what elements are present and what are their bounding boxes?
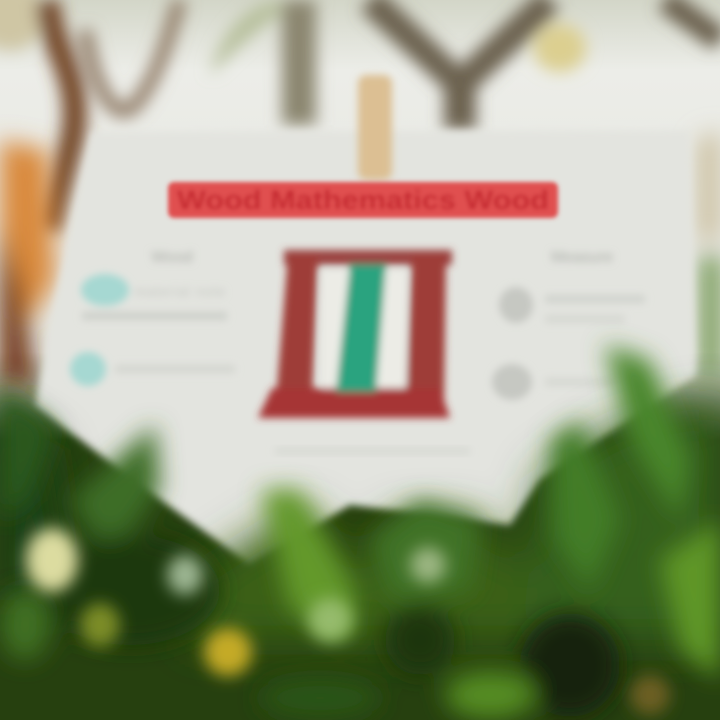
- flower: yellow left: [80, 603, 120, 647]
- bottom text line: [275, 447, 470, 455]
- leaf: centre: [370, 500, 480, 600]
- leaf: centre bright: [262, 490, 355, 640]
- icon: teal dot one: [81, 274, 129, 306]
- tree: central trunk: [282, 0, 316, 125]
- leaf: dark core: [520, 613, 620, 717]
- background trees: [0, 0, 720, 230]
- flower: right orange: [630, 675, 670, 715]
- leaf: bottom centre: [260, 678, 380, 718]
- leaf: right mid: [550, 420, 620, 590]
- tree: curved branch: [85, 0, 180, 111]
- right pillar: [406, 255, 446, 400]
- flowers: blurred highlights: [26, 528, 670, 715]
- leaf: right bright: [605, 345, 690, 520]
- heading: red title banner: Wood Mathematics Wood: [177, 185, 549, 215]
- tree: top left pale foliage: [0, 0, 45, 50]
- icon: grey dot two: [492, 364, 532, 400]
- background orange wall: [0, 130, 720, 385]
- leaf: far right: [660, 520, 720, 680]
- left pillar: [276, 255, 318, 400]
- icon: grey dot one: [499, 287, 533, 323]
- pillar base: [258, 388, 450, 418]
- flower: pale centre: [410, 547, 446, 583]
- left text block: Wood: [151, 249, 193, 266]
- leaf: dark centre: [385, 605, 455, 675]
- leaf: bottom bright: [445, 671, 535, 719]
- green column: [336, 264, 386, 392]
- heading: red title banner: [168, 182, 558, 218]
- panel: white sign: [35, 130, 696, 565]
- flower: yellow: [204, 628, 252, 676]
- icon: red pillar frame with green column: [258, 250, 452, 418]
- right text block: [492, 249, 645, 400]
- flower: pale left: [26, 528, 78, 592]
- tree: palm leaf: [210, 0, 285, 75]
- foliage: bottom green leaves: [0, 400, 720, 640]
- background sky: [0, 0, 720, 440]
- leaf: left mid: [70, 425, 160, 560]
- tree: fork base: [444, 70, 476, 130]
- tree: right branch: [665, 0, 720, 40]
- left text block: [70, 249, 235, 386]
- left text block: material note: [135, 284, 225, 299]
- leaf: bottom left: [0, 590, 50, 660]
- leaf: left cluster: [0, 385, 55, 520]
- right text block: Measure: [551, 249, 613, 266]
- icon: teal dot two: [70, 352, 106, 386]
- flower: pale leaf highlight: [308, 598, 352, 642]
- tree: branch left: [48, 0, 75, 230]
- tree: forked trunk: [370, 0, 550, 85]
- column top bar: [284, 250, 452, 265]
- white gap: [322, 270, 406, 388]
- leaf: dark left: [40, 535, 220, 645]
- tree: yellow leaf: [534, 24, 586, 72]
- flower: pale small: [167, 555, 203, 595]
- peg: [358, 75, 392, 180]
